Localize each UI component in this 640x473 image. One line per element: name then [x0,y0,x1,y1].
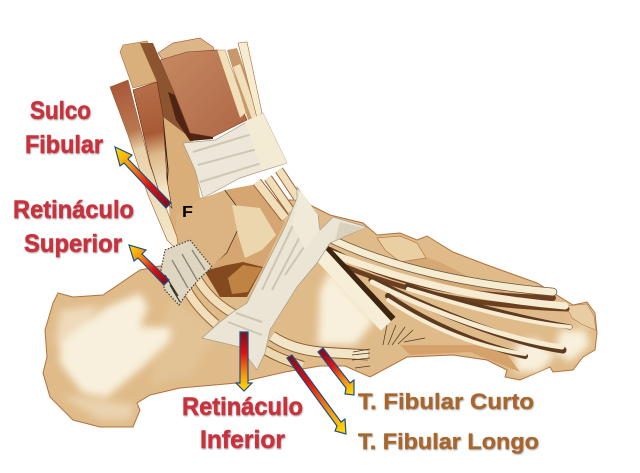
leg muscles [110,42,262,252]
label: Retináculo Inferior: Retináculo [182,393,303,421]
tendons passing under the ankle [187,170,368,366]
fan tendon ends [352,325,425,368]
upper retinaculum band [183,113,287,198]
foot extensor tendons [320,240,570,356]
arrow: sulco fibular [115,147,171,208]
arrow: retinaculo inferior [236,332,252,391]
arrow: fibular longo [287,355,346,434]
label: T. Fibular Longo: T. Fibular Longo [358,429,539,454]
label: F: F [182,204,193,221]
label: T. Fibular Curto: T. Fibular Curto [358,389,534,414]
label: Retináculo Inferior [182,393,303,454]
tibia and fibula [120,38,285,297]
illustration: foot bones and tendons [43,38,597,427]
superior retinaculum [160,240,212,305]
label: Sulco Fibular: Fibular [25,131,103,159]
label: Retináculo Superior: Superior [24,230,122,258]
label: Sulco Fibular [25,97,103,159]
inferior retinaculum band [202,187,367,370]
label: Sulco Fibular: Sulco [30,97,91,125]
arrow: retinaculo superior [129,245,169,285]
calcaneus and foot bone silhouette [43,200,597,427]
label: Retináculo Superior: Retináculo [13,196,134,224]
label: Retináculo Inferior: Inferior [200,426,285,454]
arrow: fibular curto [318,348,354,395]
label: Retináculo Superior [13,196,134,258]
